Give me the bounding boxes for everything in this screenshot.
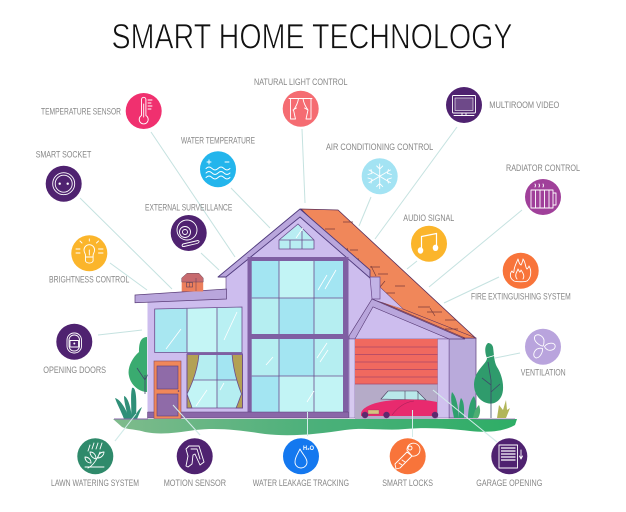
left tree [129,337,149,394]
icon: fire extinguishing system [503,253,539,289]
icon: natural light control [283,91,319,127]
icon: brightness control [71,235,107,271]
icon: multiroom video [446,87,482,123]
attic window [279,224,314,249]
icon: opening doors [56,324,92,360]
icon: external surveillance [171,215,207,251]
label: air conditioning control: AIR CONDITIONING CONTROL [326,141,433,152]
base strip [148,412,348,418]
connector lines [80,127,522,442]
label: garage opening: GARAGE OPENING [476,477,542,488]
icon: lawn watering system [77,438,113,474]
icon: radiator control [525,179,561,215]
right tree [474,343,510,418]
rear side wall and garage side [449,338,476,418]
label: brightness control: BRIGHTNESS CONTROL [49,273,129,284]
title: SMART HOME TECHNOLOGY [112,17,512,56]
garage gable [349,299,465,418]
label: motion sensor: MOTION SENSOR [164,477,226,488]
icon: audio signal [411,226,447,262]
label: opening doors: OPENING DOORS [43,364,106,375]
label: radiator control: RADIATOR CONTROL [506,162,580,173]
icon: motion sensor [177,438,213,474]
label: audio signal: AUDIO SIGNAL [403,212,454,223]
icon: garage opening [491,438,527,474]
garage opening and door [355,339,438,419]
label: smart socket: SMART SOCKET [36,148,91,159]
label: water leakage tracking: WATER LEAKAGE TRACKING [253,477,349,488]
house illustration [113,209,517,442]
car [361,391,438,418]
label: fire extinguishing system: FIRE EXTINGUISHING SYSTEM [471,290,571,301]
door [154,361,181,418]
label: lawn watering system: LAWN WATERING SYSTEM [51,477,139,488]
icon: water leakage tracking: H₂O [303,445,314,452]
icon: smart socket [46,166,82,202]
icon: ventilation [525,329,561,365]
orange roof [301,209,476,338]
label: natural light control: NATURAL LIGHT CONTROL [254,76,348,87]
icon: air conditioning control [362,158,398,194]
upper left window [155,307,242,352]
big window [248,257,348,418]
right bushes [451,392,480,418]
label: ventilation: VENTILATION [521,366,566,378]
label: temperature sensor: TEMPERATURE SENSOR [41,105,121,116]
label: external surveillance: EXTERNAL SURVEILLANCE [145,202,232,212]
ground [113,419,517,435]
icon: temperature sensor [126,93,162,129]
icon: water temperature [200,151,236,187]
icon: smart locks [390,438,426,474]
flat roof slab [135,289,226,303]
dormer post [370,277,380,299]
gable fascia [218,209,370,278]
lower window with curtains [187,354,242,408]
chimney [182,273,203,292]
left grass [115,388,142,419]
label: smart locks: SMART LOCKS [382,477,433,488]
main gable wall [148,217,449,418]
label: multiroom video: MULTIROOM VIDEO [489,99,559,110]
icon: water leakage tracking [283,438,319,474]
label: water temperature: WATER TEMPERATURE [181,134,255,145]
